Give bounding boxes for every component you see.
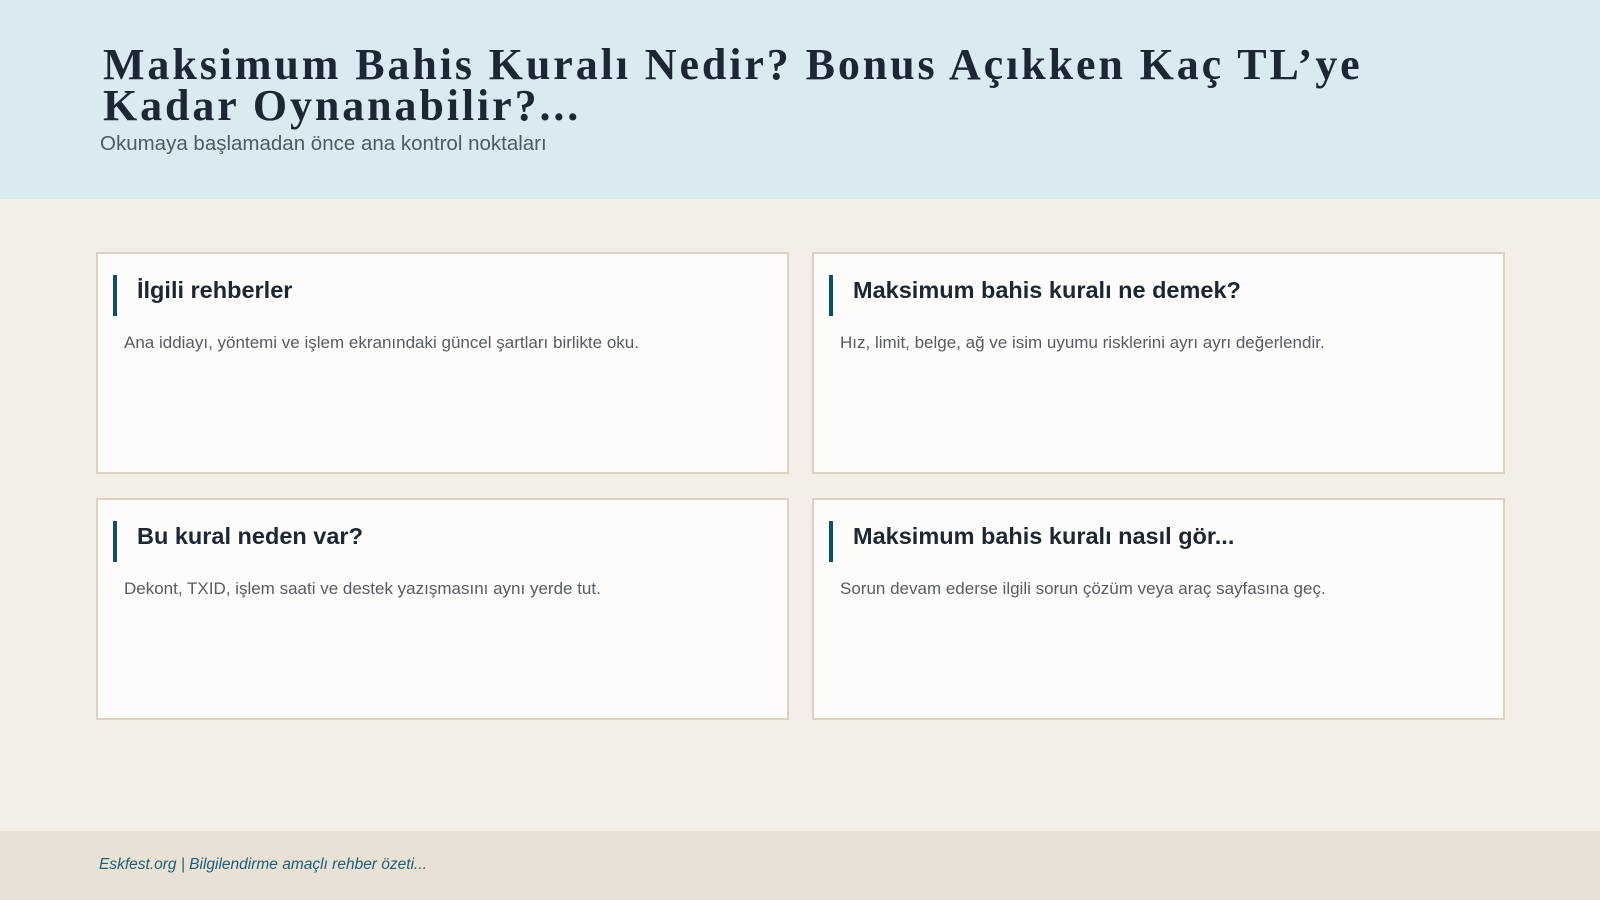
footer — [0, 831, 1600, 900]
panel: ne demek: Hız, limit, belge, ağ ve isim uyumu risklerini ayrı ayrı değerlendir. — [840, 333, 1325, 352]
panel: neden var: Bu kural neden var? — [137, 523, 363, 549]
subtitle: Okumaya başlamadan önce ana kontrol noktaları — [100, 132, 547, 155]
panel: nasıl gör: Maksimum bahis kuralı nasıl gör... — [853, 523, 1234, 549]
panel: nasıl gör: Sorun devam ederse ilgili sorun çözüm veya araç sayfasına geç. — [840, 579, 1326, 598]
panel: ilgili rehberler: İlgili rehberler — [137, 277, 292, 303]
header — [0, 0, 1600, 199]
panel: neden var — [96, 498, 789, 720]
panel: neden var: Dekont, TXID, işlem saati ve destek yazışmasını aynı yerde tut. — [124, 579, 601, 598]
panel: ne demek: Maksimum bahis kuralı ne demek? — [853, 277, 1241, 303]
panel: ne demek — [812, 252, 1505, 474]
title: Maksimum Bahis Kuralı Nedir? Bonus Açıkken Kaç TL’ye Kadar Oynanabilir?... — [103, 40, 1363, 130]
panel: ilgili rehberler — [96, 252, 789, 474]
panel: ilgili rehberler: Ana iddiayı, yöntemi ve işlem ekranındaki güncel şartları birlikte oku. — [124, 333, 639, 352]
footer: Eskfest.org | Bilgilendirme amaçlı rehber özeti... — [99, 856, 427, 873]
panel: nasıl gör — [812, 498, 1505, 720]
